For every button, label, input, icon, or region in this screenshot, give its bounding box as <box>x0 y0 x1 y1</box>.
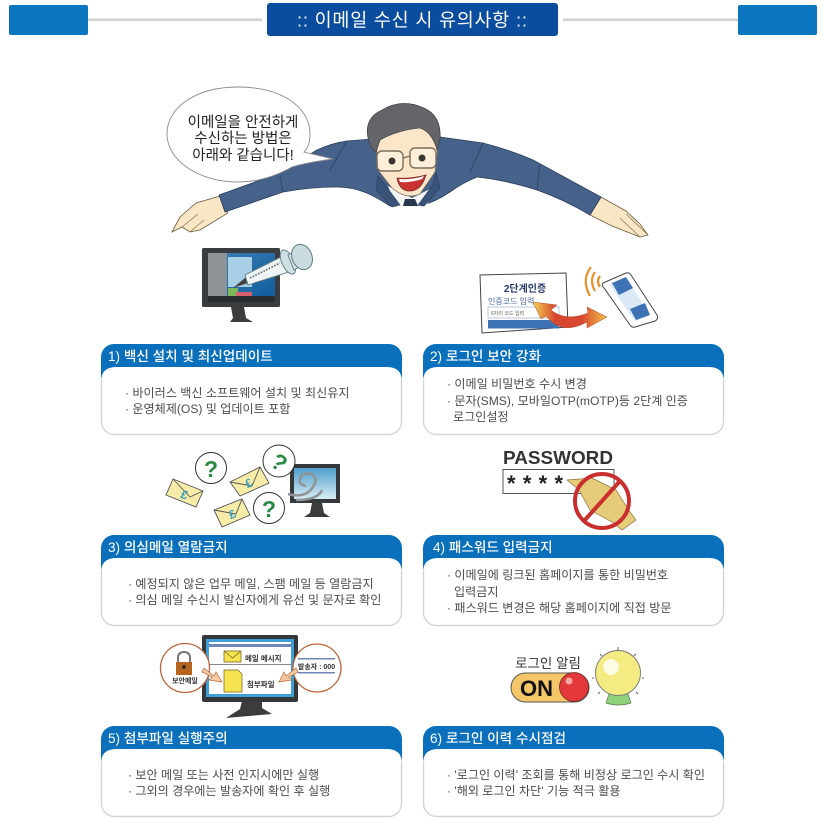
icon: login alert: 로그인 알림 <box>515 656 581 671</box>
card 5: attachments <box>101 726 402 817</box>
icon: suspicious mail: ? <box>262 496 276 522</box>
prohibition sign <box>575 474 629 528</box>
glasses <box>377 148 436 171</box>
speech bubble: 수신하는 방법은 <box>194 130 292 147</box>
icon: two-step login: 2단계인증 <box>504 282 546 295</box>
icon: attachment check on monitor: 메일 메시지 <box>245 653 282 663</box>
suit <box>219 137 601 215</box>
icon: suspicious mail: ? <box>266 448 292 477</box>
circle: sender: 발송자 : 000 <box>298 662 335 671</box>
card 2: login security <box>423 344 724 435</box>
icon: light bulb <box>592 647 644 705</box>
left header block <box>9 5 88 35</box>
card 4: password entry: 4) 패스워드 입력금지 <box>433 540 553 555</box>
card 4: password entry: 입력금지 <box>454 585 499 599</box>
right header block <box>738 5 817 35</box>
card 6: login history: · '로그인 이력' 조회를 통해 비정상 로그인 수시 확인 <box>447 768 705 782</box>
card 6: login history: · '해외 로그인 차단' 기능 적극 활용 <box>447 784 620 798</box>
icon: smartphone <box>602 273 658 327</box>
title: :: 이메일 수신 시 유의사항 :: <box>297 10 527 30</box>
lapels <box>376 172 440 207</box>
circle: secure mail <box>160 644 210 692</box>
character: flying man in a suit <box>172 103 648 237</box>
card 6: login history <box>423 726 724 817</box>
shirt and tie <box>388 186 436 207</box>
card 3: suspicious mail: · 예정되지 않은 업무 메일, 스팸 메일 등 열람금지 <box>128 577 374 591</box>
header band <box>9 3 817 36</box>
speech bubble: 아래와 같습니다! <box>192 147 294 164</box>
icon: attachment check on monitor: 첨부파일 <box>247 679 275 689</box>
card 1: antivirus <box>101 344 402 435</box>
question bubbles <box>196 445 295 524</box>
icon: suspicious mail: ? <box>204 456 218 482</box>
card 2: login security: 2) 로그인 보안 강화 <box>430 349 541 364</box>
right hand <box>590 197 648 237</box>
icon: two-step login: 6자리 코드 입력 <box>491 310 524 317</box>
icon: suspicious mail: £ <box>179 487 190 503</box>
card 1: antivirus: · 바이러스 백신 소프트웨어 설치 및 최신유지 <box>125 386 349 400</box>
card 3: suspicious mail: 3) 의심메일 열람금지 <box>108 540 228 555</box>
icon: two-step login <box>480 267 658 333</box>
mouth <box>397 175 426 191</box>
circle: secure mail: 보안메일 <box>172 676 198 685</box>
icon: syringe injecting a monitor <box>202 241 316 322</box>
icon: monitor with spiral <box>288 464 340 517</box>
card 2: login security: · 이메일 비밀번호 수시 변경 <box>447 377 587 391</box>
speech bubble <box>167 87 333 182</box>
icon: suspicious mail: £ <box>227 506 238 522</box>
envelopes <box>166 467 269 527</box>
icon: signal waves <box>586 267 600 296</box>
card 4: password entry <box>423 535 724 626</box>
face <box>376 122 439 196</box>
speech bubble: 이메일을 안전하게 <box>188 114 298 131</box>
title <box>267 3 558 36</box>
card 6: login history: 6) 로그인 이력 수시점검 <box>430 731 566 746</box>
card 3: suspicious mail <box>101 535 402 626</box>
card 1: antivirus: · 운영체제(OS) 및 업데이트 포함 <box>125 402 290 416</box>
card 5: attachments: · 보안 메일 또는 사전 인지시에만 실행 <box>128 767 319 782</box>
icon: password prohibited <box>503 447 636 530</box>
icon: password prohibited: **** <box>507 471 563 496</box>
card 2: login security: · 문자(SMS), 모바일OTP(mOTP)등 2단계 인증 <box>447 394 688 408</box>
icon: attachment check on monitor <box>160 635 341 718</box>
arrow: double-headed exchange <box>533 302 607 328</box>
icon: two-step login: 인증코드 입력 <box>488 296 534 306</box>
icon: login alert: ON <box>520 676 553 701</box>
card 5: attachments: 5) 첨부파일 실행주의 <box>108 731 228 746</box>
icon: suspicious mail: £ <box>243 475 255 491</box>
card 2: login security: 로그인설정 <box>453 410 509 424</box>
arrows <box>202 668 222 682</box>
left hand <box>172 196 228 232</box>
card 5: attachments: · 그외의 경우에는 발송자에 확인 후 실행 <box>128 783 330 798</box>
icon: suspicious mail <box>166 445 340 527</box>
card 4: password entry: · 패스워드 변경은 해당 홈페이지에 직접 방문 <box>447 601 671 615</box>
card 4: password entry: · 이메일에 링크된 홈페이지를 통한 비밀번호 <box>447 568 668 582</box>
hair <box>367 103 440 152</box>
icon: login alert <box>511 647 644 705</box>
icon: password prohibited: PASSWORD <box>503 447 613 468</box>
card 1: antivirus: 1) 백신 설치 및 최신업데이트 <box>108 349 273 364</box>
circle: sender <box>293 644 341 692</box>
card 3: suspicious mail: · 의심 메일 수신시 발신자에게 유선 및 문자로 확인 <box>128 593 381 607</box>
